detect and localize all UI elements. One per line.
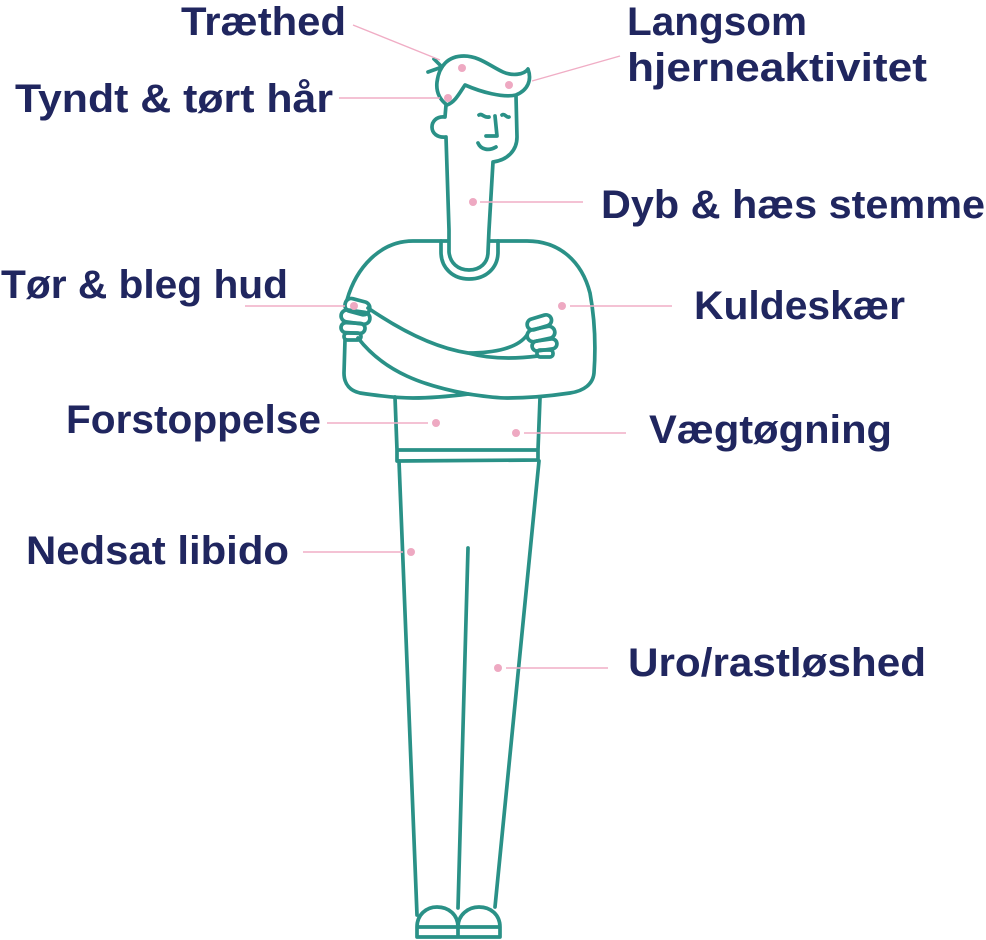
shoes xyxy=(417,907,500,937)
callout: Nedsat libido: Nedsat libido xyxy=(26,529,289,573)
hair xyxy=(437,56,530,105)
callout: Uro/rastløshed xyxy=(494,641,926,685)
crossed arms xyxy=(358,308,538,394)
figure: man with crossed arms xyxy=(340,56,595,937)
right hand xyxy=(526,313,558,357)
legs xyxy=(399,461,539,915)
callout: Tyndt & tørt hår: Tyndt & tørt hår xyxy=(15,77,333,121)
callout: Langsom hjerneaktivitet xyxy=(505,0,927,90)
collar xyxy=(441,241,498,279)
callout: Forstoppelse: Forstoppelse xyxy=(66,398,321,442)
head and neck xyxy=(432,96,517,270)
left hand xyxy=(340,297,371,340)
callout: Forstoppelse xyxy=(66,398,440,442)
callout: Nedsat libido xyxy=(26,529,415,573)
callout: Vægtøgning xyxy=(512,408,892,452)
torso and sleeves xyxy=(344,241,595,398)
callout: Kuldeskær: Kuldeskær xyxy=(694,284,905,328)
callout: Vægtøgning: Vægtøgning xyxy=(649,408,892,452)
callout: Tyndt & tørt hår xyxy=(15,77,452,121)
face xyxy=(478,115,509,149)
callout: Langsom hjerneaktivitet: Langsom xyxy=(627,0,807,44)
cowlick xyxy=(428,59,442,72)
callout: Uro/rastløshed: Uro/rastløshed xyxy=(628,641,926,685)
callout: Dyb & hæs stemme: Dyb & hæs stemme xyxy=(601,183,985,227)
callout: Træthed: Træthed xyxy=(181,0,346,44)
callout: Kuldeskær xyxy=(558,284,905,328)
callout: Langsom hjerneaktivitet: hjerneaktivitet xyxy=(627,46,927,90)
callout: Tør & bleg hud: Tør & bleg hud xyxy=(1,263,288,307)
callout: Træthed xyxy=(181,0,466,72)
shirt and waistband xyxy=(395,397,540,461)
